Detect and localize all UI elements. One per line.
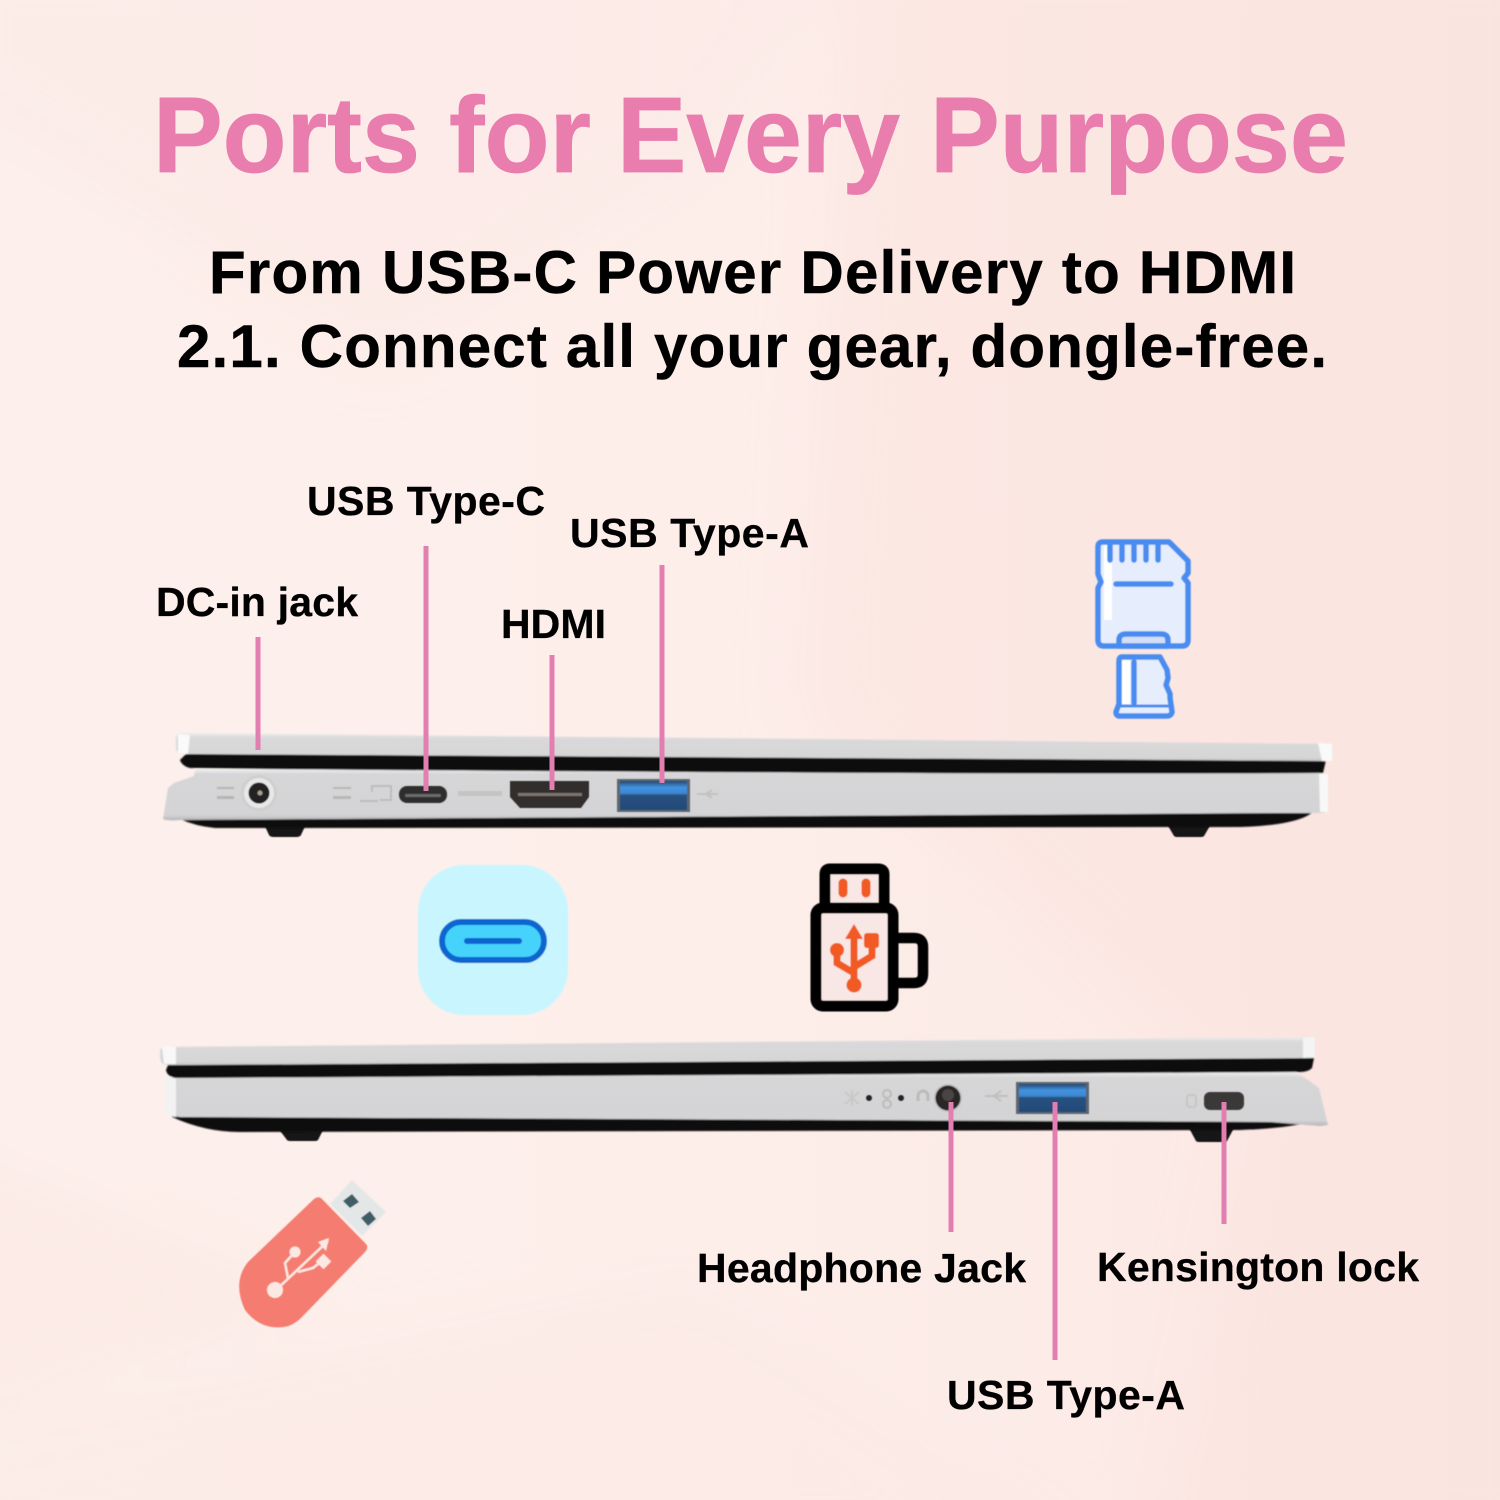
ports: HDMI	[458, 781, 589, 808]
port labels: Kensington lock	[1097, 1244, 1419, 1290]
title: Every	[617, 74, 900, 195]
port labels: DC-in jack	[156, 579, 358, 625]
icon: red USB flash drive	[239, 1180, 386, 1327]
ports: USB-A	[617, 779, 718, 812]
laptop: left side view	[163, 733, 1332, 837]
ports: DC-in jack	[217, 775, 277, 811]
ports: headphone jack	[934, 1084, 962, 1112]
laptop: right side view	[160, 1037, 1328, 1142]
icon: black USB drive	[816, 869, 923, 1006]
feet: bottom laptop	[278, 1128, 1234, 1142]
ports: USB-A second	[985, 1082, 1089, 1114]
port labels: USB Type-C	[307, 478, 545, 524]
chassis: top laptop	[163, 733, 1332, 828]
title	[153, 74, 1348, 195]
subtitle	[177, 239, 1327, 380]
ports: Kensington lock	[1187, 1092, 1244, 1110]
title: for	[449, 74, 591, 195]
port labels: Headphone Jack	[697, 1245, 1026, 1291]
port labels: HDMI	[501, 601, 606, 647]
ports: USB-C with icon marks	[333, 786, 447, 803]
ports: status indicators	[845, 1090, 928, 1108]
feet: top laptop	[264, 824, 1211, 837]
chassis: bottom laptop	[160, 1037, 1328, 1132]
icon: USB-C tile	[418, 865, 568, 1015]
title: Purpose	[930, 74, 1348, 195]
subtitle: 2.1. Connect all your gear, dongle-free.	[177, 313, 1327, 380]
icon: SD and microSD cards	[1098, 542, 1188, 716]
pointer lines	[258, 546, 1224, 1360]
subtitle: From USB-C Power Delivery to HDMI	[209, 239, 1296, 306]
port labels	[156, 478, 1419, 1418]
title: Ports	[153, 74, 420, 195]
port labels: USB Type-A	[570, 510, 809, 556]
port labels: USB Type-A	[947, 1372, 1185, 1418]
